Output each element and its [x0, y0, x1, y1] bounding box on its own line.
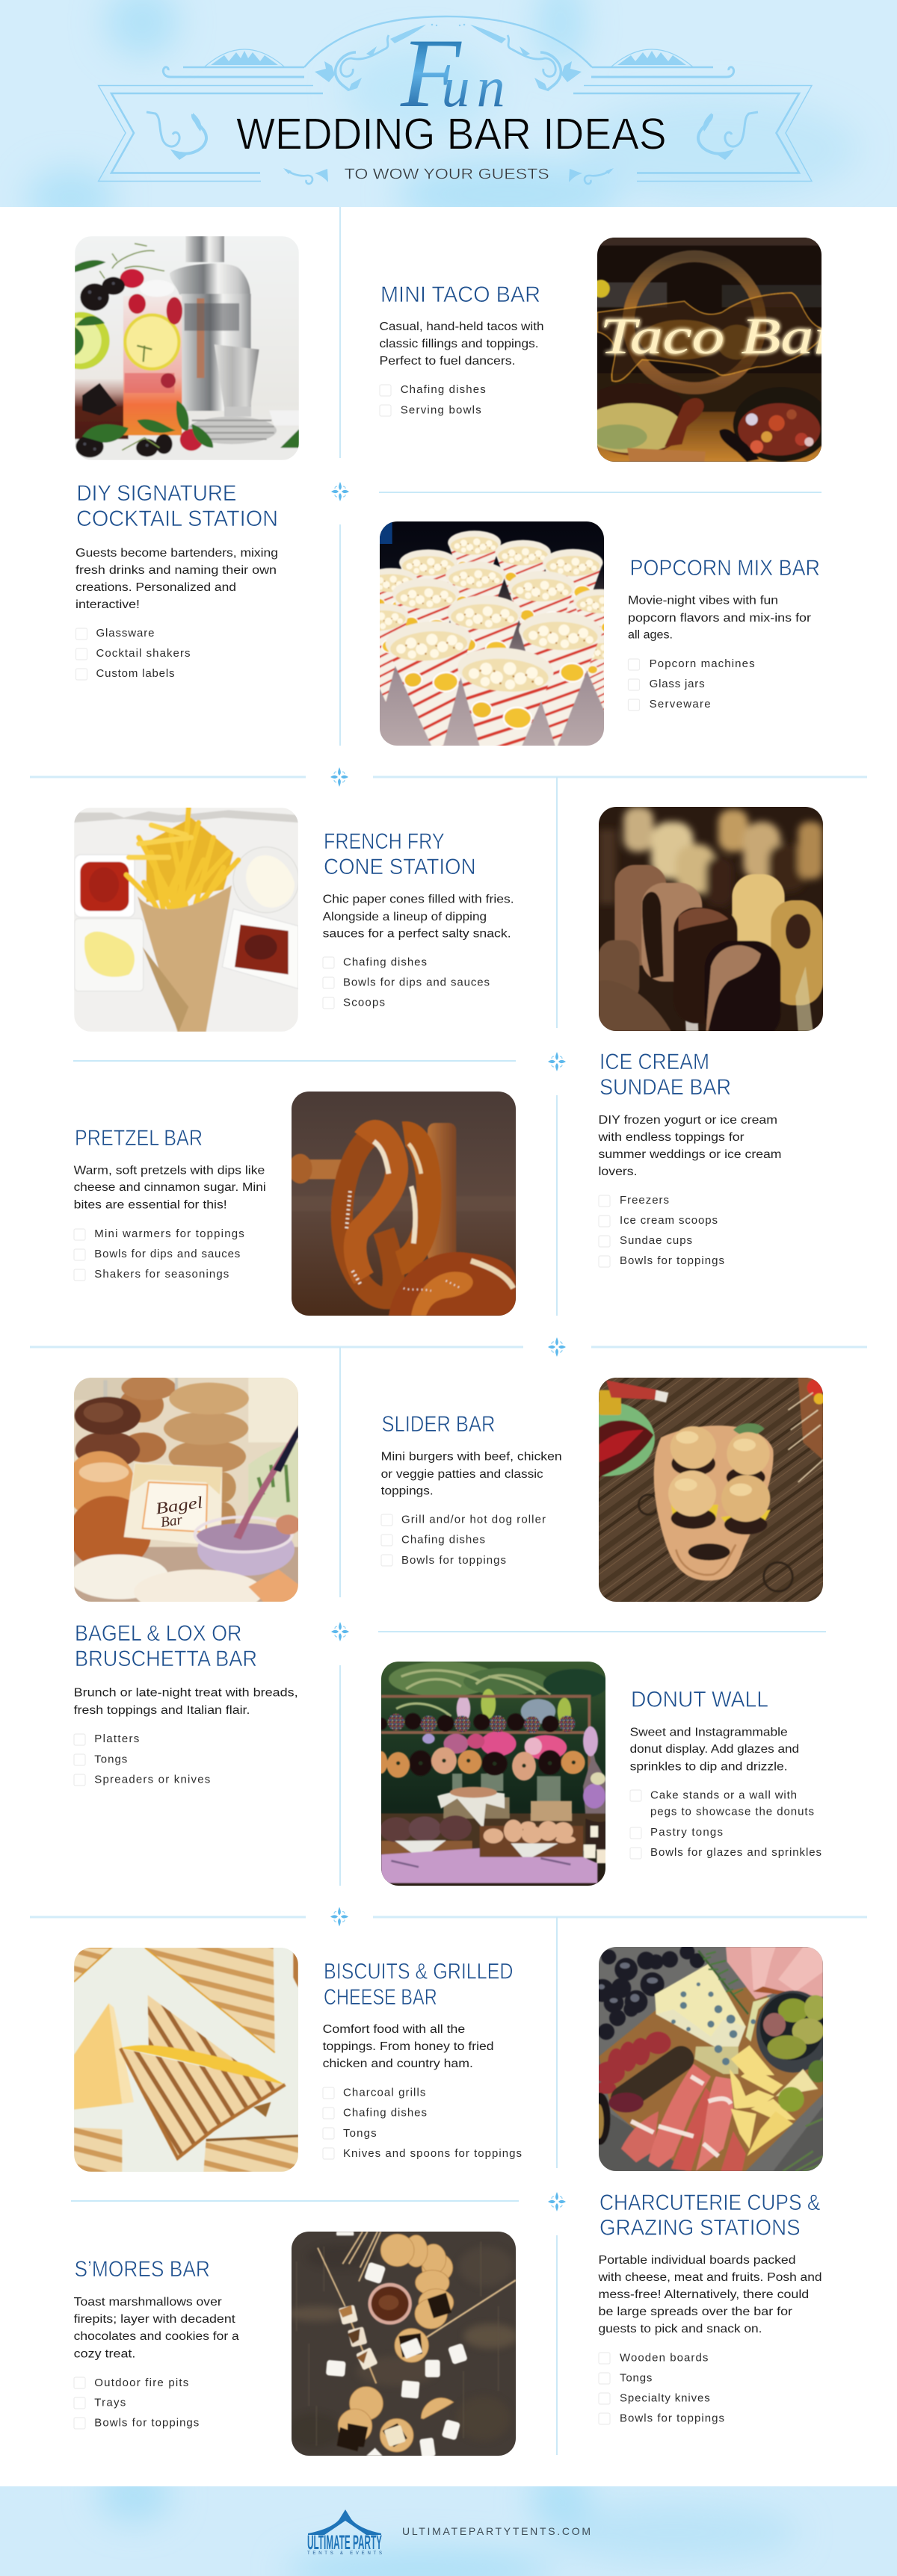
checklist: Glass jars	[650, 678, 705, 690]
description: chocolates and cookies for a	[74, 2330, 239, 2343]
checklist: Ice cream scoops	[620, 1214, 718, 1227]
description: with endless toppings for	[597, 1131, 745, 1144]
description	[323, 894, 514, 940]
heading: COCKTAIL STATION	[76, 507, 278, 531]
panel: mini taco bar	[380, 238, 839, 462]
checklist	[599, 1194, 724, 1267]
description	[597, 2254, 822, 2335]
panel: charcuterie cups and grazing stations	[590, 1945, 830, 2424]
checklist: Chafing dishes	[401, 1534, 485, 1546]
description	[597, 1114, 782, 1178]
heading: S’MORES BAR	[75, 2257, 210, 2282]
checklist	[323, 2086, 522, 2160]
panel: DIY signature cocktail station	[52, 236, 299, 680]
checklist: Platters	[94, 1733, 139, 1745]
description: Warm, soft pretzels with dips like	[74, 1164, 265, 1177]
photo: charcuterie board	[590, 1945, 830, 2171]
description: toppings. From honey to fried	[323, 2040, 494, 2053]
side scrolls	[147, 112, 758, 160]
checklist: Tongs	[620, 2371, 652, 2385]
description: guests to pick and snack on.	[598, 2323, 762, 2335]
heading	[75, 1621, 257, 1671]
description: classic fillings and toppings.	[380, 338, 538, 350]
photo: ice cream bars	[599, 807, 823, 1041]
description	[74, 1687, 298, 1717]
panel: row 2 dividers	[30, 777, 867, 1357]
panel: slider bar	[381, 1378, 824, 1602]
checklist: Outdoor fire pits	[94, 2377, 188, 2389]
photo: french fries	[74, 808, 299, 1032]
checklist: Pastry tongs	[650, 1826, 723, 1839]
description	[630, 1726, 799, 1774]
heading: BISCUITS & GRILLED	[324, 1959, 513, 1984]
checklist: Bowls for dips and sauces	[343, 976, 490, 989]
checklist: Grill and/or hot dog roller	[401, 1514, 546, 1526]
description: summer weddings or ice cream	[598, 1148, 782, 1161]
checklist	[74, 1227, 244, 1281]
heading: CHARCUTERIE CUPS &	[599, 2190, 821, 2215]
checklist: Mini warmers for toppings	[94, 1227, 244, 1240]
heading	[324, 829, 476, 879]
checklist: Sundae cups	[620, 1234, 692, 1247]
arch scrolls	[315, 24, 582, 91]
heading	[324, 1959, 513, 2010]
header frame and ornaments	[99, 16, 812, 184]
checklist: Specialty knives	[620, 2391, 710, 2404]
checklist: Tongs	[94, 1753, 127, 1765]
checklist: Scoops	[343, 997, 385, 1009]
description: Comfort food with all the	[323, 2023, 465, 2036]
subtitle: TO WOW YOUR GUESTS	[345, 166, 549, 182]
heading: SLIDER BAR	[381, 1412, 495, 1437]
checklist: Cake stands or a wall with	[650, 1789, 797, 1801]
checklist: pegs to showcase the donuts	[650, 1806, 814, 1818]
description: mess-free! Alternatively, there could	[598, 2288, 809, 2301]
description: fresh drinks and naming their own	[75, 564, 277, 577]
heading: SUNDAE BAR	[599, 1075, 731, 1100]
description: cozy treat.	[74, 2347, 135, 2360]
checklist: Chafing dishes	[343, 956, 427, 968]
heading: DIY SIGNATURE	[76, 481, 236, 506]
panel: biscuits and grilled cheese bar	[74, 1948, 522, 2172]
heading: DONUT WALL	[631, 1688, 768, 1712]
description: Brunch or late-night treat with breads,	[74, 1687, 298, 1700]
description: sprinkles to dip and drizzle.	[630, 1761, 788, 1774]
bottom scrolls	[283, 168, 614, 184]
photo: cocktails	[52, 236, 299, 460]
checklist	[630, 1789, 822, 1859]
description	[381, 1451, 562, 1498]
description: Guests become bartenders, mixing	[75, 547, 278, 560]
checklist	[74, 2377, 199, 2430]
small fans	[204, 49, 694, 67]
checklist: Charcoal grills	[343, 2086, 425, 2099]
panel: bagel and lox or bruschetta bar	[65, 1375, 300, 1786]
footer background	[0, 2486, 897, 2576]
description: or veggie patties and classic	[381, 1468, 543, 1481]
heading: BRUSCHETTA BAR	[75, 1647, 257, 1671]
checklist	[381, 1514, 546, 1567]
panel: s'mores bar	[74, 2232, 518, 2458]
checklist: Custom labels	[96, 667, 175, 680]
description: fresh toppings and Italian flair.	[74, 1704, 250, 1717]
checklist: Bowls for toppings	[620, 2412, 724, 2424]
panel: row 4 dividers	[71, 1917, 566, 2455]
description: Alongside a lineup of dipping	[323, 911, 487, 923]
panel: row 3 dividers	[30, 1347, 867, 1926]
panel: ice cream sundae bar	[597, 807, 823, 1267]
checklist: Bowls for glazes and sprinkles	[650, 1846, 822, 1859]
checklist: Serving bowls	[401, 403, 481, 417]
description	[323, 2023, 494, 2070]
heading: BAGEL & LOX OR	[75, 1621, 242, 1646]
photo: bagels: Bagel	[155, 1493, 204, 1517]
description: firepits; layer with decadent	[74, 2313, 235, 2326]
footer website: ULTIMATEPARTYTENTS.COM	[402, 2525, 591, 2537]
checklist	[380, 383, 486, 417]
panel: popcorn mix bar	[348, 521, 820, 809]
photo: taco neon sign	[597, 238, 822, 462]
photo: popcorn cones	[380, 521, 604, 746]
description: interactive!	[75, 598, 140, 611]
description: bites are essential for this!	[74, 1199, 227, 1212]
description	[628, 595, 812, 641]
panel: french fry cone station	[74, 808, 514, 1032]
text: ULTIMATE PARTY	[307, 2531, 382, 2554]
description	[74, 2296, 239, 2360]
header background	[0, 0, 897, 228]
checklist: Glassware	[96, 627, 154, 640]
checklist	[74, 1733, 210, 1786]
description: Casual, hand-held tacos with	[380, 321, 544, 333]
photo: bagels	[74, 1378, 298, 1602]
checklist: Chafing dishes	[401, 383, 486, 396]
description: Mini burgers with beef, chicken	[381, 1451, 562, 1464]
heading	[599, 2190, 821, 2241]
panel: row 1 dividers	[30, 207, 867, 787]
description: Movie-night vibes with fun	[628, 595, 778, 607]
heading: PRETZEL BAR	[75, 1126, 203, 1151]
description: toppings.	[381, 1485, 434, 1498]
checklist: Trays	[94, 2397, 126, 2409]
checklist: Wooden boards	[620, 2352, 708, 2364]
description	[75, 547, 278, 611]
photo: sliders on wood	[599, 1378, 823, 1602]
description: popcorn flavors and mix-ins for	[628, 612, 812, 625]
checklist: Bowls for toppings	[401, 1554, 506, 1567]
checklist: Knives and spoons for toppings	[343, 2147, 522, 2160]
checklist	[628, 657, 755, 710]
photo: s'mores ingredients	[286, 2232, 518, 2458]
description: with cheese, meat and fruits. Posh and	[597, 2271, 822, 2284]
panel: donut wall	[375, 1662, 822, 1886]
description: DIY frozen yogurt or ice cream	[598, 1114, 777, 1127]
checklist: Bowls for dips and sauces	[94, 1248, 240, 1260]
checklist: Bowls for toppings	[620, 1254, 724, 1267]
description: cheese and cinnamon sugar. Mini	[74, 1181, 266, 1194]
photo: grilled cheese	[74, 1948, 298, 2172]
photo: taco neon sign: Taco Bar	[599, 308, 839, 365]
checklist	[76, 627, 190, 680]
logo: Ultimate Party Tents and Events	[307, 2510, 382, 2556]
checklist: Tongs	[343, 2127, 377, 2140]
description: sauces for a perfect salty snack.	[323, 928, 511, 940]
description	[380, 321, 544, 368]
checklist: Cocktail shakers	[96, 647, 190, 660]
description: lovers.	[598, 1165, 637, 1178]
description	[74, 1164, 266, 1212]
photo: donut wall	[375, 1662, 608, 1886]
checklist: Popcorn machines	[650, 657, 755, 670]
description: creations. Personalized and	[75, 581, 236, 594]
description: all ages.	[628, 629, 673, 641]
logo: Ultimate Party Tents and Events: TENTS & EVENTS	[307, 2551, 382, 2556]
description: chicken and country ham.	[323, 2058, 473, 2070]
checklist: Chafing dishes	[343, 2106, 427, 2119]
description: Sweet and Instagrammable	[630, 1726, 788, 1739]
checklist: Serveware	[650, 698, 711, 710]
heading: CONE STATION	[324, 855, 476, 879]
checklist: Spreaders or knives	[94, 1774, 210, 1786]
checklist: Freezers	[620, 1194, 669, 1207]
heading: GRAZING STATIONS	[599, 2216, 801, 2241]
description: Perfect to fuel dancers.	[380, 355, 516, 368]
heading: ICE CREAM	[599, 1050, 709, 1074]
checklist: Shakers for seasonings	[94, 1268, 229, 1281]
heading: CHEESE BAR	[324, 1985, 437, 2010]
description: donut display. Add glazes and	[630, 1743, 799, 1756]
title: wedding bar ideas: WEDDING BAR IDEAS	[236, 109, 667, 158]
heading: FRENCH FRY	[324, 829, 445, 854]
checklist	[323, 956, 490, 1009]
title: Fun: Fun	[400, 18, 512, 128]
photo: bagels: Bar	[160, 1512, 184, 1531]
description: Chic paper cones filled with fries.	[323, 894, 514, 905]
photo: pretzels	[289, 1092, 516, 1316]
checklist: Bowls for toppings	[94, 2417, 199, 2430]
heading: MINI TACO BAR	[380, 282, 540, 307]
heading	[599, 1050, 731, 1100]
description: be large spreads over the bar for	[598, 2306, 793, 2318]
heading: POPCORN MIX BAR	[629, 556, 820, 580]
description: Toast marshmallows over	[74, 2296, 222, 2309]
checklist	[599, 2352, 724, 2424]
heading	[76, 481, 278, 531]
description: Portable individual boards packed	[598, 2254, 795, 2267]
panel: pretzel bar	[74, 1092, 516, 1316]
